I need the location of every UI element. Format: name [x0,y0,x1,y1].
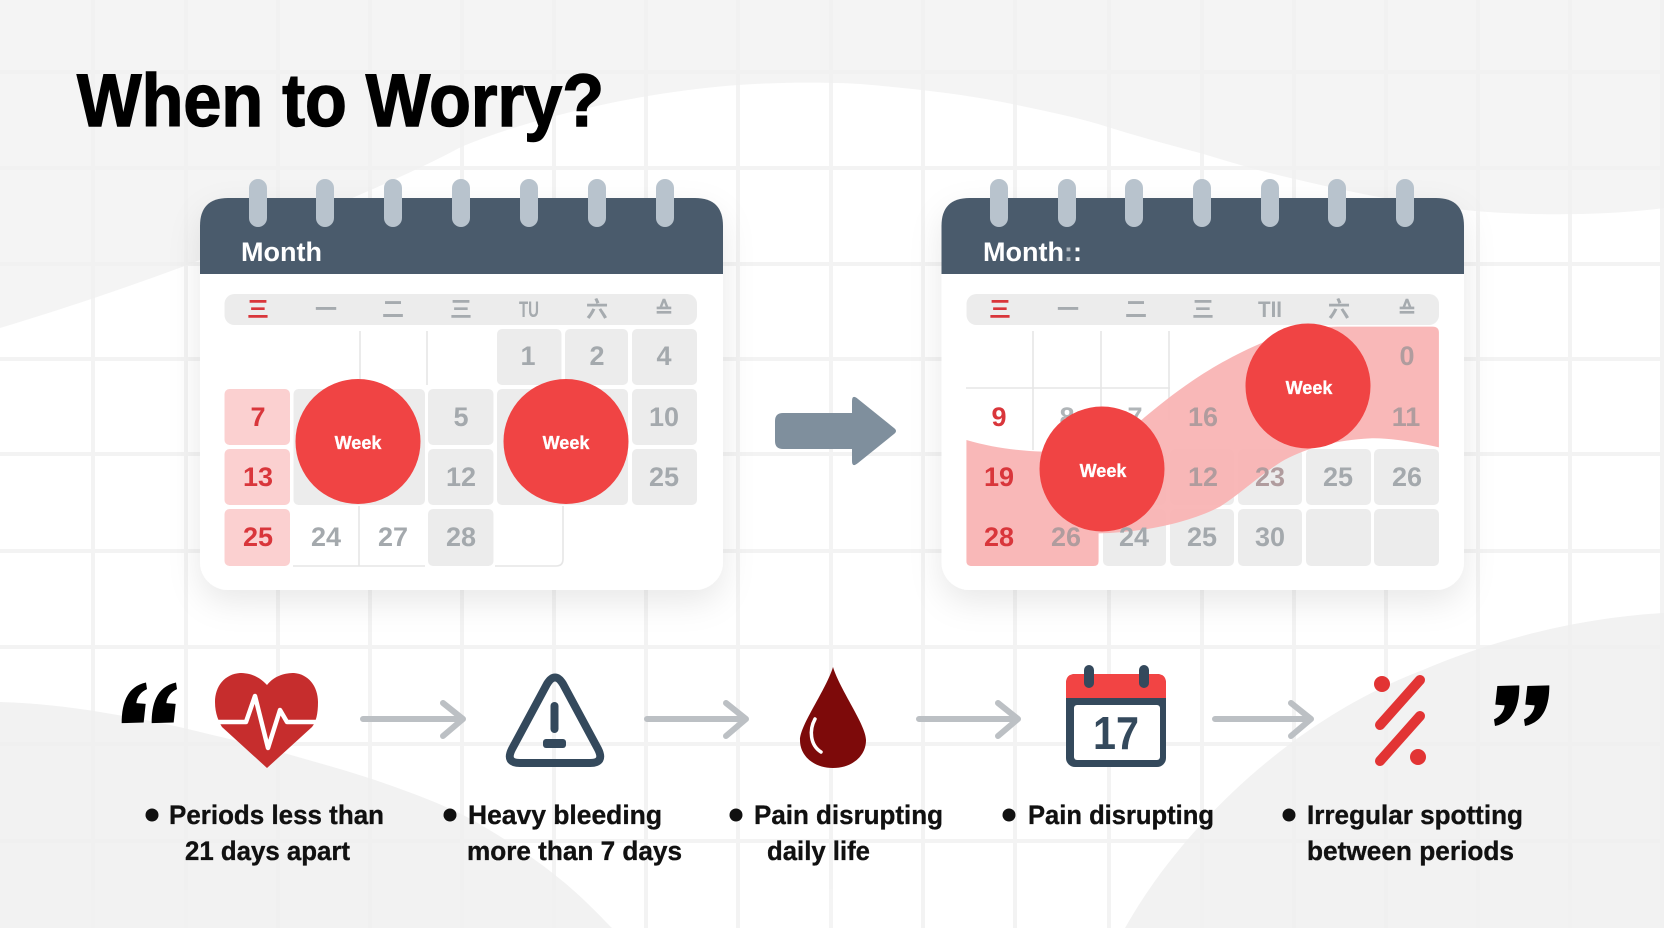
week marker 2: Week [1286,378,1333,398]
arrow: step 1 to 2 [363,703,463,736]
date numbers: 25 [1323,462,1353,492]
weekday bar: TII [1258,297,1282,322]
text: irregular spotting between periods [1282,800,1523,866]
calendar header [942,198,1464,274]
date numbers: 11 [1392,402,1420,432]
weekday bar [966,294,1439,325]
highlighted cycle band [966,327,1439,566]
date numbers: 26 [1051,522,1081,552]
date grid: 28 [446,522,476,552]
text: pain disrupting daily life: daily life [767,836,870,866]
date grid [224,329,697,566]
icon: closing quote [1494,685,1549,726]
calendar card [942,198,1464,590]
text: pain disrupting daily life [730,800,943,866]
weekday bar: ≙ [655,297,673,322]
week marker 1 [296,379,420,504]
panel: right calendar [942,179,1464,590]
weekday bar: 三 [247,297,269,322]
date grid: 4 [656,341,672,371]
date grid: 1 [520,341,536,371]
calendar card [200,198,723,590]
text: pain disrupting: Pain disrupting [1028,800,1214,830]
week marker 2 [1246,324,1370,448]
date grid: 12 [446,462,476,492]
date grid: 7 [250,402,266,432]
date numbers: 12 [1188,462,1218,492]
date grid: 8 [1059,402,1075,432]
date numbers: 25 [1187,522,1217,552]
panel: left calendar [200,179,723,590]
date numbers: 16 [1188,402,1218,432]
date numbers: 26 [1392,462,1422,492]
date grid: 25 [649,462,679,492]
text: periods less than 21 days apart: 21 days apart [185,836,350,866]
weekday bar: 六 [586,297,608,322]
icon: calendar 17 [1066,665,1166,767]
weekday bar: 三 [450,297,472,322]
date numbers [984,341,1422,552]
icon: warning triangle [510,678,600,763]
icon: calendar 17: 17 [1093,707,1139,759]
text: heavy bleeding: Heavy bleeding [468,800,662,830]
date numbers: 24 [1119,522,1149,552]
weekday bar: 二 [1125,297,1147,322]
text: irregular spotting between periods: between periods [1307,836,1514,866]
week marker 1 [1040,406,1164,532]
weekday bar: ≙ [1398,297,1416,322]
text: heavy bleeding [444,800,682,866]
text: irregular spotting between periods: Irregular spotting [1307,800,1523,830]
spiral rings [990,179,1414,227]
weekday bar: 六 [1328,297,1350,322]
date grid: 24 [311,522,341,552]
week marker 2: Week [543,433,590,453]
date grid: 2 [589,341,605,371]
text: periods less than 21 days apart: Periods less than [169,800,384,830]
arrow: between calendars [775,397,896,465]
date grid [966,331,1439,566]
arrow: step 4 to 5 [1215,703,1311,736]
date numbers: 9 [991,402,1007,432]
date numbers: 30 [1255,522,1285,552]
text: periods less than 21 days apart [146,800,384,866]
date numbers: 23 [1255,462,1285,492]
title: When to Worry? [77,59,604,142]
icon: percent spotting [1374,676,1426,765]
weekday bar: 一 [1057,297,1079,322]
text: pain disrupting daily life: Pain disrupting [754,800,943,830]
date grid: 27 [378,522,408,552]
calendar header [200,198,723,274]
date grid: 7 [1127,402,1143,432]
weekday bar: 二 [382,297,404,322]
date numbers: 28 [984,522,1014,552]
date numbers: 19 [984,462,1014,492]
arrow: step 3 to 4 [919,703,1018,736]
icon: blood drop [800,667,866,768]
date grid: 10 [649,402,679,432]
weekday bar: 一 [315,297,337,322]
month label: Month:: [983,237,1082,267]
date numbers: 0 [1399,341,1415,371]
week marker 1: Week [1080,461,1127,481]
weekday bar [224,294,697,325]
text: heavy bleeding: more than 7 days [467,836,682,866]
month label: Month [241,237,322,267]
week marker 1: Week [335,433,382,453]
weekday bar: TU [519,297,539,322]
weekday bar: 三 [989,297,1011,322]
date grid: 5 [453,402,469,432]
arrow: step 2 to 3 [647,703,746,736]
date grid: 25 [243,522,273,552]
spiral rings [249,179,674,227]
icon: opening quote [122,683,177,723]
weekday bar: 三 [1192,297,1214,322]
date grid: 13 [243,462,273,492]
icon: heart with pulse [214,673,319,768]
week marker 2 [504,379,628,504]
